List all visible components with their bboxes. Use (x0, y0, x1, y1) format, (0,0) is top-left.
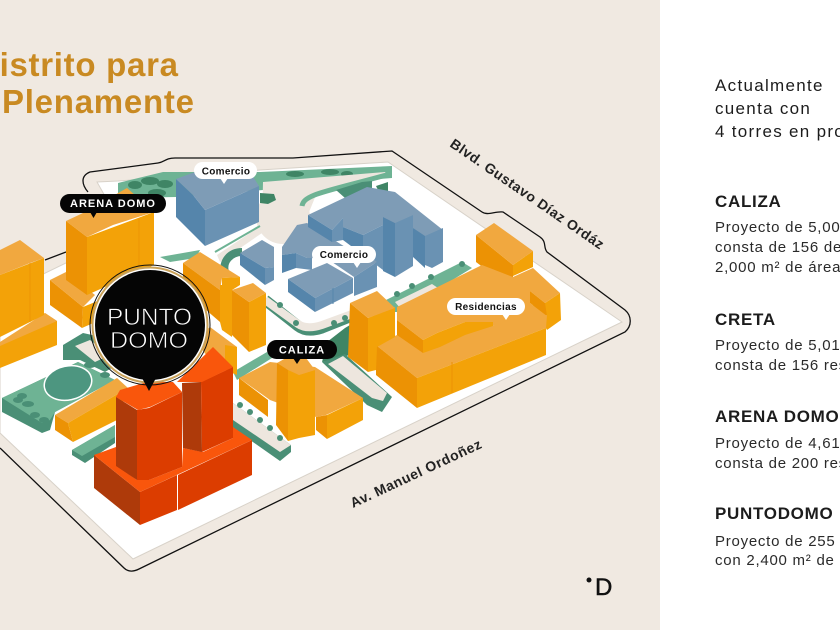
label: Comercio north (194, 162, 257, 184)
text block: Creta (715, 310, 840, 374)
building: west residence (0, 240, 57, 368)
intro text (715, 76, 840, 141)
text block: Puntodomo: PUNTODOMO (715, 504, 833, 523)
site plate (0, 162, 622, 559)
green strip behind Residencias (386, 261, 472, 312)
label: Residencias: Residencias (455, 302, 517, 313)
intro text: Actualmente (715, 76, 824, 95)
text block: Caliza: CALIZA (715, 192, 782, 211)
building: Comercio west (176, 172, 259, 246)
building: Residencias (348, 223, 561, 408)
label: Comercio central (312, 246, 376, 268)
label: Punto Domo badge (90, 265, 210, 391)
building: Arena Domo (50, 188, 154, 328)
label: Punto Domo badge: PUNTO (107, 304, 192, 331)
park pond (41, 361, 95, 405)
label: Residencias (447, 298, 525, 320)
label: Punto Domo badge: DOMO (110, 327, 188, 353)
label: Arena Domo (60, 194, 166, 218)
site road outline (0, 151, 630, 571)
building: Punto Domo (94, 347, 252, 525)
intro text: cuenta con (715, 99, 811, 118)
building: long block by park (55, 378, 128, 442)
title: Plenamente (2, 83, 194, 120)
text block: Creta: CRETA (715, 310, 776, 329)
text block: Arena Domo: ARENA DOMO (715, 407, 839, 426)
label: Comercio central: Comercio (320, 250, 368, 261)
text block: Caliza (715, 192, 840, 276)
building: Caliza (239, 350, 363, 441)
building: Comercio central (240, 187, 443, 312)
label: Caliza (267, 340, 337, 364)
building: block behind Punto Domo (195, 327, 237, 375)
panel: right information column (660, 0, 840, 630)
title (0, 46, 194, 120)
text block: Arena Domo (715, 407, 840, 472)
label: Caliza: CALIZA (279, 344, 325, 356)
label: Comercio north: Comercio (202, 166, 250, 178)
icon: D logo: D (595, 574, 612, 601)
building: Creta (183, 252, 266, 352)
road label: Av. Manuel Ordoñez: Av. Manuel Ordoñez (348, 436, 484, 511)
icon: D logo (586, 574, 612, 601)
label: Arena Domo: ARENA DOMO (70, 198, 156, 210)
road label: Blvd. Gustavo Díaz Ordáz: Blvd. Gustavo Díaz Ordáz (447, 135, 607, 252)
green areas and paths (2, 166, 472, 463)
text block: Puntodomo (715, 504, 840, 569)
